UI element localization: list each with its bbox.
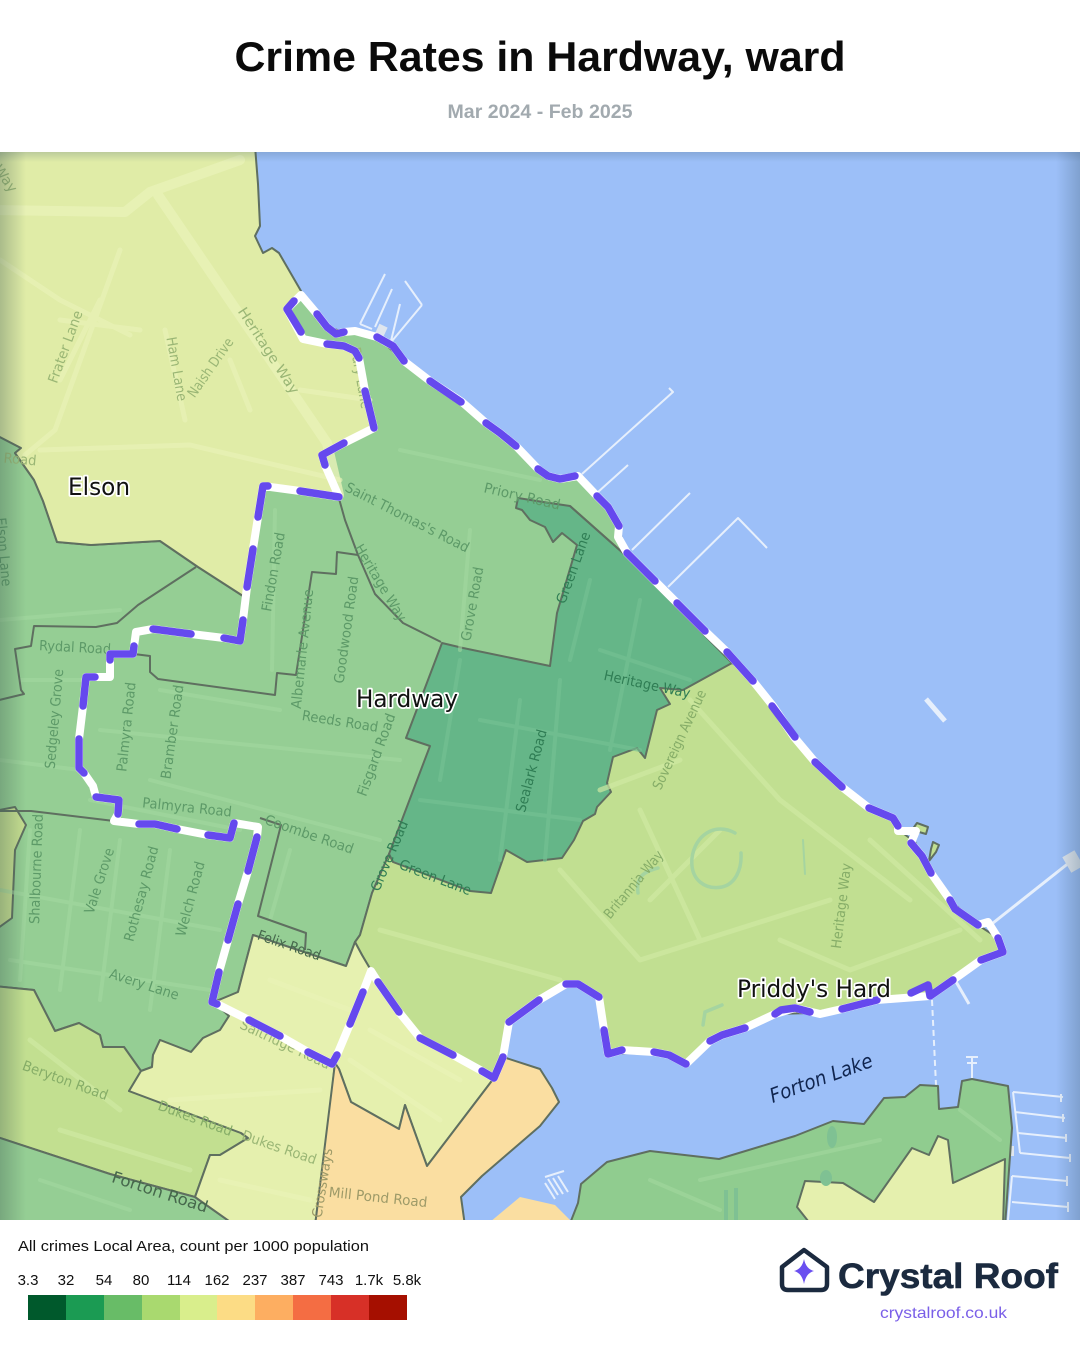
label: Rydal Road: Rydal Road xyxy=(39,638,111,658)
place label: Hardway: Hardway xyxy=(356,685,458,713)
label: Saint Thomas's Road: Saint Thomas's Road xyxy=(342,480,472,556)
zone: Felix Road pale yellow xyxy=(214,935,372,1063)
label: Priory Road: Priory Road xyxy=(482,480,562,514)
park circle and pond features xyxy=(638,829,805,1025)
label: Dukes Road west: Dukes Road xyxy=(156,1098,234,1140)
legend scale values: 387 xyxy=(280,1272,306,1289)
label: Beryton Road: Beryton Road xyxy=(20,1058,110,1104)
label: Palmyra Road horizontal: Palmyra Road xyxy=(141,795,233,821)
zone: south bank pale yellow xyxy=(797,1136,1005,1226)
pier end blocks xyxy=(375,324,1080,1156)
legend scale values: 1.7k xyxy=(355,1272,384,1289)
label: Heritage Way south: Heritage Way xyxy=(829,862,855,950)
label: Frater Lane: Frater Lane xyxy=(45,309,87,385)
label: Palmyra Road vertical: Palmyra Road xyxy=(114,681,140,773)
label: Heritage Way east: Heritage Way xyxy=(602,668,692,702)
legend colour ramp xyxy=(28,1295,407,1320)
label: Grove Road north: Grove Road xyxy=(459,566,487,642)
legend scale values: 162 xyxy=(204,1272,230,1289)
brand logo xyxy=(782,1250,1058,1322)
legend scale values: 5.8k xyxy=(393,1272,422,1289)
label: Felix Road: Felix Road xyxy=(255,928,323,964)
ward boundary: white line xyxy=(79,295,1003,1078)
label: Sovereign Avenue: Sovereign Avenue xyxy=(650,688,710,792)
label: Vale Grove: Vale Grove xyxy=(82,846,118,916)
label: Naish Drive: Naish Drive xyxy=(185,335,237,401)
label: Albemarle Avenue: Albemarle Avenue xyxy=(289,588,317,710)
ward boundary: purple dashes xyxy=(79,301,1003,1078)
brand name: Crystal Roof xyxy=(838,1257,1058,1296)
legend scale values: 743 xyxy=(318,1272,344,1289)
legend xyxy=(18,1238,422,1320)
label: Mill Pond Road: Mill Pond Road xyxy=(328,1185,428,1211)
title: Crime Rates in Hardway, ward xyxy=(234,33,846,80)
label: Saltridge Road: Saltridge Road xyxy=(237,1017,333,1073)
zone: Priddy's Hard light green xyxy=(355,663,1003,1078)
label: Fisgard Road: Fisgard Road xyxy=(355,711,399,799)
label: Road: Road xyxy=(3,451,37,469)
place label: Priddy's Hard: Priddy's Hard xyxy=(737,975,891,1003)
label: Avery Lane: Avery Lane xyxy=(107,966,181,1004)
choropleth map of Hardway ward xyxy=(0,146,1080,1226)
label: Ham Lane: Ham Lane xyxy=(162,336,190,402)
label: Heritage Way centre: Heritage Way xyxy=(351,542,409,624)
south bank ponds xyxy=(724,1126,837,1220)
zone: Beryton Road light green xyxy=(0,986,248,1197)
zone: Mill Pond orange xyxy=(315,1057,559,1226)
label: Forton Road: Forton Road xyxy=(110,1168,210,1216)
zone: east of Crossways pale yellow xyxy=(335,972,494,1166)
label: Bury Lane: Bury Lane xyxy=(347,346,373,410)
label: Reeds Road: Reeds Road xyxy=(301,708,379,736)
legend scale values: 3.3 xyxy=(18,1272,38,1289)
label: Green Lane north: Green Lane xyxy=(554,530,594,606)
label: Crossways: Crossways xyxy=(310,1147,336,1219)
map edge shading xyxy=(0,152,1080,1220)
icon: house with star xyxy=(782,1250,827,1290)
label: Bramber Road: Bramber Road xyxy=(158,684,188,780)
zone: west Hardway medium green xyxy=(0,301,622,1070)
label: Findon Road: Findon Road xyxy=(259,531,289,613)
label: Grove Road south: Grove Road xyxy=(368,818,412,894)
water background xyxy=(256,152,1080,1220)
street labels xyxy=(0,162,876,1219)
legend scale values: 32 xyxy=(58,1272,74,1289)
label: Rothesay Road: Rothesay Road xyxy=(122,845,162,943)
subtitle: date range: Mar 2024 - Feb 2025 xyxy=(448,102,633,123)
road network xyxy=(0,160,1000,1210)
label: Heritage Way north: Heritage Way xyxy=(234,305,302,397)
label: Goodwood Road: Goodwood Road xyxy=(332,575,362,685)
zone: Elson pale yellow-green xyxy=(0,146,374,596)
legend title: All crimes Local Area, count per 1000 population xyxy=(18,1238,369,1255)
label: Sealark Road: Sealark Road xyxy=(513,728,551,814)
zone: Dukes Road pale yellow xyxy=(129,1002,335,1226)
islets xyxy=(912,823,939,861)
inner ward lines xyxy=(0,495,623,950)
legend scale values: 54 xyxy=(96,1272,112,1289)
legend scale values xyxy=(18,1272,422,1289)
label: Dukes Road east: Dukes Road xyxy=(240,1128,318,1168)
zone: south bank green xyxy=(569,1079,1012,1226)
label: Green Lane south: Green Lane xyxy=(397,857,473,899)
brand url: crystalroof.co.uk xyxy=(880,1305,1008,1322)
label: Britannia Way: Britannia Way xyxy=(601,848,667,922)
zone: west strip light green xyxy=(0,807,26,931)
marina piers and jetties xyxy=(360,274,1070,1220)
zone: Hardway centre dark green xyxy=(389,498,732,893)
label: Welch Road: Welch Road xyxy=(173,860,209,938)
label: Shalbourne Road: Shalbourne Road xyxy=(27,814,47,924)
label: Forton Lake: Forton Lake xyxy=(766,1048,876,1108)
zone: Forton Road south-west green xyxy=(0,1137,226,1220)
label: Coombe Road: Coombe Road xyxy=(262,812,356,858)
place label: Elson: Elson xyxy=(68,473,130,501)
legend scale values: 114 xyxy=(167,1272,191,1289)
label: Sedgeley Grove: Sedgeley Grove xyxy=(43,668,67,770)
legend scale values: 237 xyxy=(242,1272,268,1289)
legend scale values: 80 xyxy=(133,1272,149,1289)
zone: south Mill Pond orange fragment xyxy=(492,1197,570,1220)
